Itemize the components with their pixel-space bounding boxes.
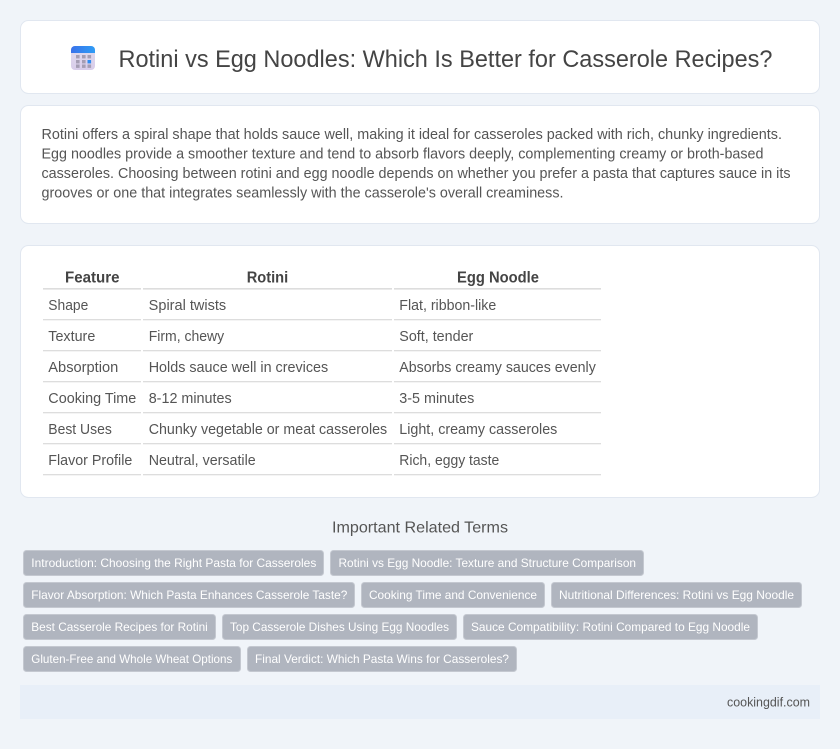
panel: related term tags: Nutritional Differences: Rotini vs Egg Noodle [559,588,794,602]
table row: best uses: Light, creamy casseroles [399,422,557,438]
table row: shape: Shape [48,298,88,314]
panel: related term tags: Introduction: Choosing the Right Pasta for Casseroles [31,556,316,570]
panel: related term tags: Sauce Compatibility: Rotini Compared to Egg Noodle [471,620,750,634]
table row: texture [48,329,473,345]
panel: related term tags: Best Casserole Recipes for Rotini [31,620,208,634]
panel: related term tags: Gluten-Free and Whole Wheat Options [31,652,232,666]
footer: cookingdif.com [727,696,810,710]
panel: comparison table [20,246,820,498]
panel: related term tags: Top Casserole Dishes Using Egg Noodles [230,620,449,634]
panel: related term tags: Cooking Time and Convenience [369,588,537,602]
footer [20,685,820,719]
heading: related terms: Important Related Terms [332,520,508,537]
table header row: Feature [65,270,120,287]
table header row [65,270,539,287]
table row: cooking time: Cooking Time [48,391,136,407]
table row: best uses: Chunky vegetable or meat casseroles [149,422,387,438]
table row: shape: Spiral twists [149,298,226,314]
table header row: Egg Noodle [457,270,539,287]
table row: cooking time: 3-5 minutes [399,391,474,407]
panel: related term tags: Rotini vs Egg Noodle: Texture and Structure Comparison [338,556,636,570]
text block: introduction paragraph: Egg noodles provide a smoother texture and tend to absorb flavors deeply, complementing creamy or broth-based [42,146,764,162]
table row: shape [48,298,496,314]
title: Rotini vs Egg Noodles: Which Is Better for Casserole Recipes? [118,46,772,73]
table row: absorption [48,360,597,376]
text block: introduction paragraph: casseroles. Choosing between rotini and egg noodle depends on whether you prefer a pasta that captures sauce in its [42,166,790,182]
panel: title header [20,20,820,94]
table row: cooking time [48,391,474,407]
icon: calendar [71,46,95,70]
table row: flavor profile: Rich, eggy taste [399,453,499,469]
table row: best uses: Best Uses [48,422,112,438]
table row: texture: Firm, chewy [149,329,225,345]
table row: absorption: Absorption [48,360,118,376]
panel: introduction [20,106,820,224]
panel: related term tags [24,550,802,672]
table row: absorption: Absorbs creamy sauces evenly [399,360,597,376]
text block: introduction paragraph [42,127,790,202]
table row: texture: Soft, tender [399,329,473,345]
text block: introduction paragraph: Rotini offers a spiral shape that holds sauce well, making it ideal for casseroles packed with rich, chunky ingredients. [42,127,782,143]
text block: introduction paragraph: grooves or one that integrates seamlessly with the casserole's overall creaminess. [42,186,564,202]
table row: shape: Flat, ribbon-like [399,298,496,314]
table row: flavor profile: Flavor Profile [48,453,132,469]
table row: flavor profile [48,453,499,469]
table row: texture: Texture [48,329,95,345]
table row: best uses [48,422,557,438]
panel: related term tags: Flavor Absorption: Which Pasta Enhances Casserole Taste? [31,588,348,602]
table header row: Rotini [247,270,288,287]
table row: flavor profile: Neutral, versatile [149,453,256,469]
table row: absorption: Holds sauce well in crevices [149,360,328,376]
table row: cooking time: 8-12 minutes [149,391,232,407]
panel: related term tags: Final Verdict: Which Pasta Wins for Casseroles? [255,652,509,666]
